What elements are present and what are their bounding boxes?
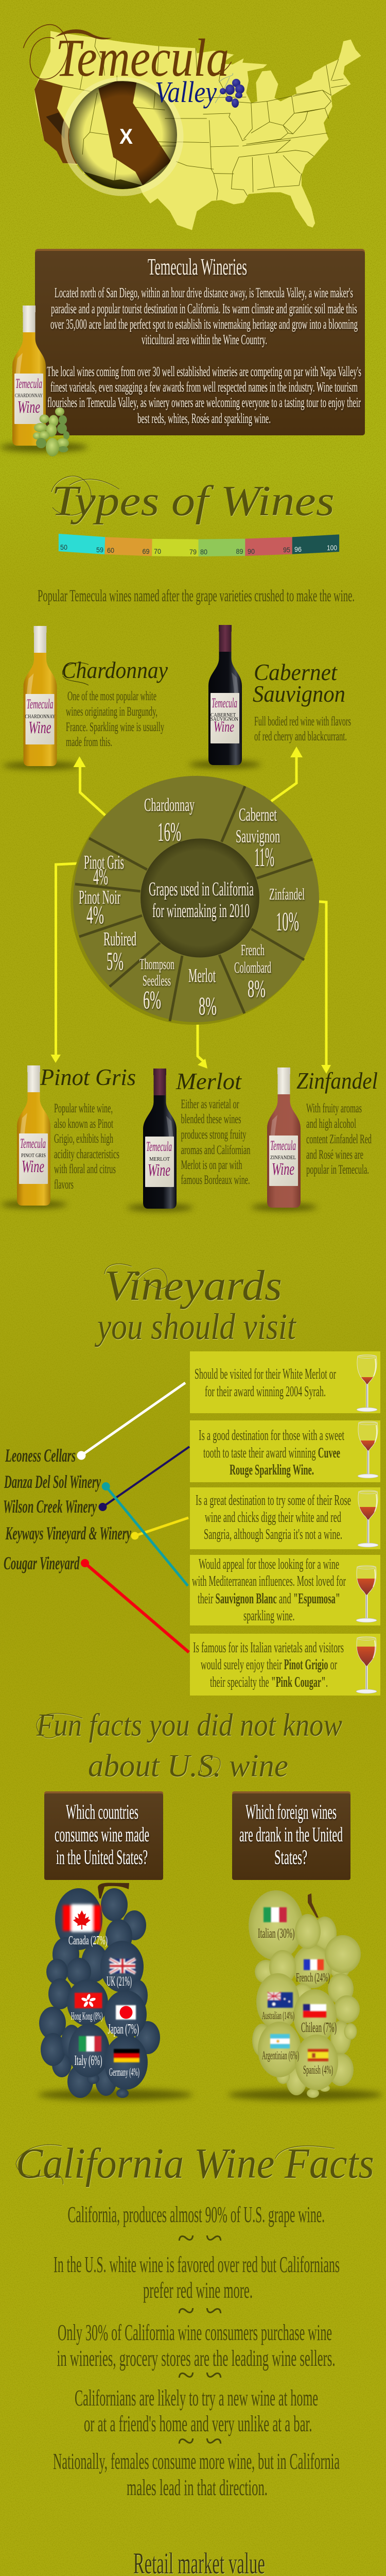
- bottle: [208, 625, 242, 765]
- icon: green grapes: [33, 408, 69, 456]
- description: also known as Pinot: [54, 1117, 113, 1131]
- grape cluster: countries buying US wine: Italy (6%): [74, 2053, 102, 2068]
- wine card: Zinfandel: [251, 1067, 378, 1211]
- description: [306, 1101, 372, 1177]
- panel text: [55, 1800, 149, 1869]
- scale numbers: 50: [60, 543, 67, 551]
- heading: Fun facts: Fun facts you did not know: [36, 1708, 342, 1743]
- description: blended these wines: [181, 1112, 241, 1126]
- flag: Italy: [264, 1907, 287, 1922]
- chart labels: Merlot: [188, 965, 216, 987]
- grape cluster: countries buying US wine: UK (21%): [107, 1974, 132, 1989]
- bottle: Wine: [214, 718, 234, 735]
- panel: vineyard description 4: [190, 1555, 380, 1625]
- heading: Fun facts: [36, 1708, 342, 1784]
- panel text: [239, 1800, 343, 1869]
- scale numbers: 79: [189, 548, 197, 556]
- flag: Chile: [303, 2004, 326, 2018]
- grape cluster: countries buying US wine: Hong Kong (8%): [71, 2010, 103, 2022]
- bottle: Wine: [29, 718, 51, 737]
- grapes: [249, 1890, 361, 2098]
- wine card: Merlot: Merlot: [176, 1068, 242, 1094]
- wine card: Merlot: [127, 1068, 251, 1211]
- description: with floral and citrus: [54, 1162, 116, 1176]
- description: Either as varietal or: [181, 1097, 239, 1111]
- bottle: Wine: [22, 1157, 44, 1176]
- description: produces strong fruity: [181, 1128, 247, 1142]
- divider tilde: ~: [178, 2424, 195, 2458]
- bottle: Wine: [272, 1160, 294, 1179]
- vineyard names: Keyways Vineyard & Winery: [5, 1523, 132, 1544]
- scale numbers: 70: [154, 547, 161, 555]
- panel text: Which countries: [66, 1800, 138, 1823]
- description: [181, 1097, 251, 1187]
- divider tilde: ~: [205, 2294, 222, 2328]
- connector lines: vineyards to descriptions: [77, 1383, 189, 1652]
- bottle: CHARDONNAY: [25, 714, 56, 720]
- US outline: [34, 31, 361, 230]
- bottle: MERLOT: [149, 1157, 170, 1162]
- scale numbers: 69: [142, 547, 150, 555]
- description: [254, 715, 351, 743]
- scale numbers: 80: [200, 548, 207, 556]
- description: acidity characteristics: [54, 1147, 119, 1161]
- arrows: wheel to bottles: [50, 747, 331, 1074]
- panel: vineyard description 1: [190, 1351, 380, 1413]
- bottle: [267, 1067, 301, 1208]
- bottle: PINOT GRIS: [21, 1153, 46, 1159]
- chart labels: 4%: [86, 900, 104, 929]
- chart labels: Cabernet: [239, 804, 277, 825]
- description: France. Sparkling wine is usually: [66, 720, 164, 734]
- grape cluster: foreign wines drunk in US: Australian (14%): [262, 2009, 294, 2022]
- panel: which foreign wines are drunk in US: [232, 1791, 350, 1880]
- divider tilde: [178, 2358, 222, 2392]
- panel: vineyard description 3: [190, 1487, 380, 1549]
- flag: Australia: [268, 1992, 293, 2008]
- X marker: X: [119, 124, 133, 148]
- chart labels: for winemaking in 2010: [152, 900, 250, 922]
- donut chart: grapes used in California 2010: [71, 776, 319, 1025]
- heading: retail market value: [133, 2547, 265, 2576]
- panel text: best reds, whites, Rosés and sparkling wine.: [137, 411, 271, 426]
- chart labels: Chardonnay: [144, 794, 195, 815]
- bottle: Temecula: [20, 1136, 46, 1151]
- wine card: Cabernet Sauvignon: Cabernet: [254, 659, 338, 685]
- icon: wine glass: [356, 1355, 378, 1412]
- description: aromas and Californian: [181, 1143, 251, 1157]
- description: flavors: [54, 1178, 74, 1192]
- description: wines originating in Burgundy,: [66, 705, 157, 719]
- chart labels: Grapes used in California: [149, 878, 254, 900]
- wine card: Cabernet Sauvignon: [189, 625, 351, 768]
- scale numbers: 89: [236, 547, 243, 555]
- chart labels: Pinot Gris: [84, 852, 124, 873]
- description: [66, 689, 164, 749]
- scale numbers: 96: [294, 545, 302, 553]
- grape cluster: countries buying US wine: [38, 1883, 192, 2100]
- rating colour scale: [59, 534, 339, 556]
- wine card: Chardonnay: [3, 626, 168, 769]
- description: famous Bordeaux wine.: [181, 1173, 250, 1187]
- wine card: Pinot Gris: [1, 1064, 136, 1208]
- flag: Argentina: [270, 2034, 290, 2048]
- panel: vineyard description 5: their specialty the "Pink Cougar".: [210, 1674, 328, 1690]
- chart labels: [79, 794, 305, 1020]
- panel text: States?: [274, 1845, 307, 1869]
- grape cluster: countries buying US wine: Japan (7%): [108, 2021, 139, 2037]
- bottle: SAUVIGNON: [210, 717, 238, 722]
- scale numbers: 95: [283, 546, 290, 554]
- divider tilde: ~: [178, 2294, 195, 2328]
- flag: Hong Kong: [75, 1993, 102, 2008]
- lens with magnified California: [69, 81, 177, 189]
- chart labels: 11%: [254, 843, 274, 872]
- description: [54, 1101, 119, 1192]
- divider tilde: [178, 2294, 222, 2328]
- wine card: Zinfandel: Zinfandel: [296, 1067, 378, 1094]
- vineyard names: [3, 1445, 132, 1573]
- description: Grigio, exhibits high: [54, 1132, 113, 1146]
- flag: Canada: [63, 1904, 101, 1932]
- divider tilde: ~: [178, 2221, 195, 2255]
- vineyard names: Wilson Creek Winery: [3, 1496, 97, 1517]
- flag: UK: [110, 1959, 135, 1973]
- bottle: CABERNET: [210, 713, 236, 718]
- description: Popular white wine,: [54, 1101, 113, 1115]
- label: Canada: Canada (27%): [68, 1934, 108, 1947]
- grape cluster: foreign wines drunk in US: [228, 1890, 382, 2100]
- panel: vineyard description 4: their Sauvignon Blanc and "Espumosa": [198, 1590, 340, 1607]
- label: Italian: Italian (30%): [258, 1926, 294, 1941]
- bottle: Temecula: [270, 1138, 296, 1153]
- panel: vineyard description 2: Rouge Sparkling Wine.: [230, 1462, 314, 1478]
- heading: Vineyards you should visit: Vineyards: [104, 1262, 282, 1310]
- chart labels: Thompson: [139, 956, 174, 973]
- vineyard names: Leoness Cellars: [5, 1445, 76, 1466]
- chart labels: French: [241, 941, 265, 959]
- grape cluster: foreign wines drunk in US: Chilean (7%): [301, 2020, 337, 2035]
- panel text: viticultural area within the Wine Country.: [142, 332, 267, 347]
- flag: Germany: [114, 2049, 139, 2062]
- California facts list: prefer red wine more.: [143, 2278, 253, 2303]
- icon: wine glass: [357, 1490, 379, 1547]
- divider tilde: ~: [205, 2221, 222, 2255]
- bottle: Temecula: [146, 1139, 172, 1154]
- divider tilde: [178, 2221, 222, 2255]
- icon: wine glass: [356, 1565, 377, 1622]
- bottle with grapes: intro chardonnay: CHARDONNAY: [15, 393, 43, 399]
- scale numbers: 100: [327, 544, 337, 552]
- wine card: Chardonnay: Chardonnay: [62, 657, 168, 683]
- description: made from this.: [66, 735, 112, 749]
- grape cluster: foreign wines drunk in US: Spanish (4%): [303, 2063, 333, 2076]
- panel text: consumes wine made: [55, 1823, 149, 1846]
- title: Valley: Valley: [155, 75, 217, 109]
- heading: Fun facts: about U.S. wine: [88, 1749, 288, 1784]
- lens ring: [65, 80, 180, 193]
- bottle: [24, 626, 57, 766]
- bottle: [17, 1065, 50, 1206]
- California facts list: [53, 2202, 340, 2500]
- dividers: [75, 786, 312, 1021]
- divider tilde: ~: [178, 2358, 195, 2392]
- panel: vineyard description 2: [190, 1420, 380, 1482]
- icon: wine glass: [357, 1421, 379, 1478]
- flag: France: [304, 1959, 324, 1970]
- bottle: Wine: [148, 1161, 170, 1180]
- description: One of the most popular white: [67, 689, 156, 703]
- flag: Spain: [308, 2049, 328, 2061]
- icon: wine glass: [356, 1636, 377, 1693]
- heading: Vineyards you should visit: you should visit: [94, 1306, 297, 1347]
- bottle with grapes: intro chardonnay: [0, 306, 87, 456]
- title: Temecula: Temecula: [56, 28, 229, 88]
- bottle with grapes: intro chardonnay: Wine: [17, 398, 40, 417]
- description: Merlot is on par with: [181, 1158, 242, 1172]
- scale numbers: 59: [96, 546, 103, 554]
- icon: blue grapes: [215, 73, 244, 108]
- chart labels: 16%: [157, 818, 181, 847]
- bottle: ZINFANDEL: [270, 1155, 296, 1161]
- scale numbers: [60, 543, 337, 556]
- scale numbers: 60: [107, 546, 114, 554]
- panel text: [47, 254, 361, 426]
- chart labels: Rubired: [103, 928, 136, 950]
- grape cluster: foreign wines drunk in US: Argentinian (6%): [262, 2049, 299, 2062]
- vineyard names: Cougar Vineyard: [4, 1553, 80, 1573]
- heading: Types of Wines: Types of Wines: [51, 477, 335, 525]
- grape cluster: foreign wines drunk in US: French (24%): [296, 1971, 330, 1985]
- California facts list: males lead in that direction.: [127, 2475, 268, 2500]
- grape cluster: countries buying US wine: Germany (4%): [109, 2065, 139, 2078]
- panel: vineyard description 5: [190, 1634, 380, 1696]
- heading: Vineyards you should visit: [94, 1262, 297, 1347]
- chart labels: Zinfandel: [269, 885, 305, 903]
- chart labels: Pinot Noir: [79, 887, 120, 908]
- wine card: Cabernet Sauvignon: Sauvignon: [253, 681, 345, 707]
- bottle: Temecula: [27, 697, 54, 711]
- bottle: [143, 1069, 177, 1209]
- centre of chart: [140, 838, 259, 958]
- chart labels: Sauvignon: [236, 826, 280, 846]
- divider tilde: [178, 2424, 222, 2458]
- chart labels: Colombard: [234, 958, 271, 976]
- bottle with grapes: intro chardonnay: Temecula: [15, 376, 42, 391]
- panel: vineyard description 4: sparkling wine.: [243, 1607, 294, 1624]
- wine card: Pinot Gris: Pinot Gris: [40, 1064, 136, 1090]
- bottle: Temecula: [212, 696, 237, 710]
- flag: Italy: [79, 2036, 101, 2052]
- chart labels: 5%: [107, 946, 124, 975]
- chart labels: 6%: [143, 985, 161, 1014]
- panel: Temecula Wineries intro: [35, 249, 365, 435]
- scale numbers: 90: [248, 547, 255, 555]
- chart labels: 4%: [93, 864, 108, 889]
- vineyard names: Danza Del Sol Winery: [4, 1471, 101, 1492]
- flag: Japan: [116, 2005, 136, 2020]
- panel text: in the United States?: [56, 1845, 148, 1869]
- panel text: Temecula Wineries: [148, 254, 247, 280]
- panel: which countries consume US wine: [44, 1791, 163, 1880]
- panel: vineyard description 5: would surely enjoy their Pinot Grigio or: [201, 1656, 337, 1673]
- chart labels: 8%: [248, 975, 266, 1003]
- map: United States with magnified California lens: [23, 25, 361, 230]
- chart labels: 8%: [199, 991, 217, 1020]
- chart labels: Seedless: [143, 972, 171, 989]
- chart labels: 10%: [276, 907, 299, 937]
- divider tilde: ~: [205, 2424, 222, 2458]
- divider tilde: ~: [205, 2358, 222, 2392]
- grapes: [39, 1888, 160, 2098]
